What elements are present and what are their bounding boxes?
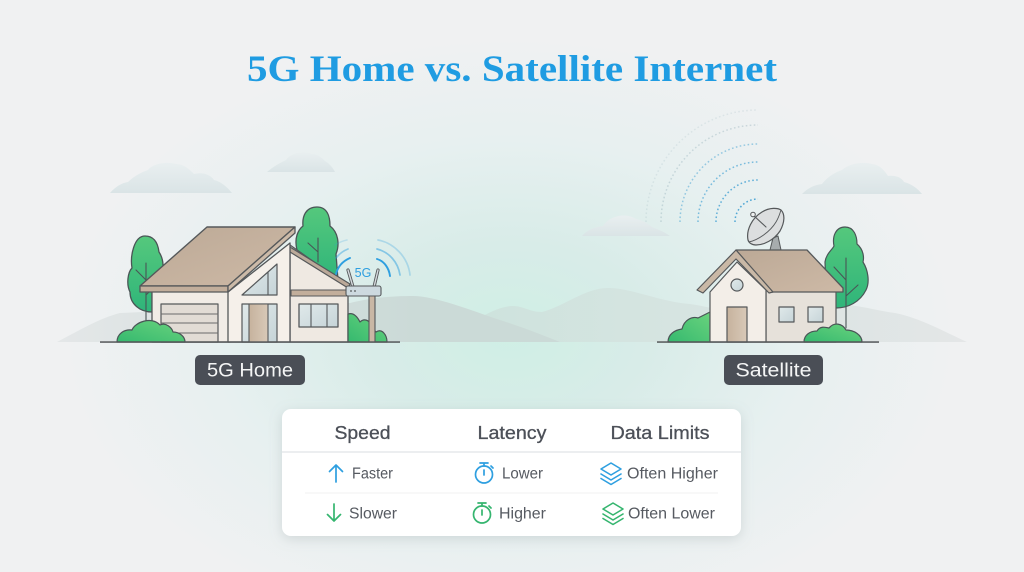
right wing band [291,290,347,296]
icon: blue layers [601,463,621,484]
back tree [296,207,338,280]
window two [808,307,823,322]
icon: green layers [603,503,623,524]
triangular window [242,264,277,295]
title: 5G Home vs. Satellite Internet [247,49,778,90]
wifi waves [335,240,410,276]
satellite dish [748,208,784,250]
row one: 5G values: Faster [352,466,393,482]
row two: satellite values: Higher [499,506,546,522]
window one [779,307,794,322]
header row: Data Limits [610,423,710,443]
5G label: 5G [355,266,371,280]
gable wall [710,262,766,342]
label: Satellite: Satellite [736,360,812,382]
row divider [305,492,718,494]
icon: arrow up [330,465,342,482]
right wing window [299,304,338,327]
header row [334,423,710,443]
round window [731,279,743,291]
row one: 5G values: Often Higher [627,466,718,482]
label: 5G Home [195,355,305,385]
satellite home illustration [657,208,879,343]
garage door [161,304,218,342]
header row: Latency [478,423,546,443]
garage wing wall [152,290,230,342]
icon: arrow down [328,504,340,521]
header row: Speed [334,423,390,443]
right bush [804,324,862,342]
router [346,270,381,296]
front door with side lights [242,304,277,342]
row one: 5G values [352,466,718,482]
row one: 5G values: Lower [502,466,543,482]
centre gable wall [228,243,290,342]
door [727,307,747,342]
icon: green stopwatch [474,503,491,523]
header divider [282,451,741,453]
row two: satellite values: Slower [349,506,397,522]
right wing wall [290,245,348,342]
satellite signal arcs [646,110,758,222]
tree [825,227,868,328]
left tree [128,236,163,322]
roof [697,250,843,293]
router post [369,296,375,342]
left bush [117,321,185,342]
right bush [348,314,387,342]
ground line [100,341,400,343]
comparison table [282,409,741,536]
icon: blue stopwatch [476,463,493,483]
right wall [766,290,836,342]
5G home illustration [100,207,410,343]
right wing roof edge [290,247,350,288]
left bush [668,312,710,342]
row two: satellite values [349,506,715,522]
ground line [657,341,879,343]
card [282,409,741,536]
label: Satellite [724,355,823,385]
main roof [140,227,295,292]
label: 5G Home: 5G Home [207,360,293,382]
background hills [57,288,967,342]
clouds [110,152,922,236]
row two: satellite values: Often Lower [628,506,715,522]
